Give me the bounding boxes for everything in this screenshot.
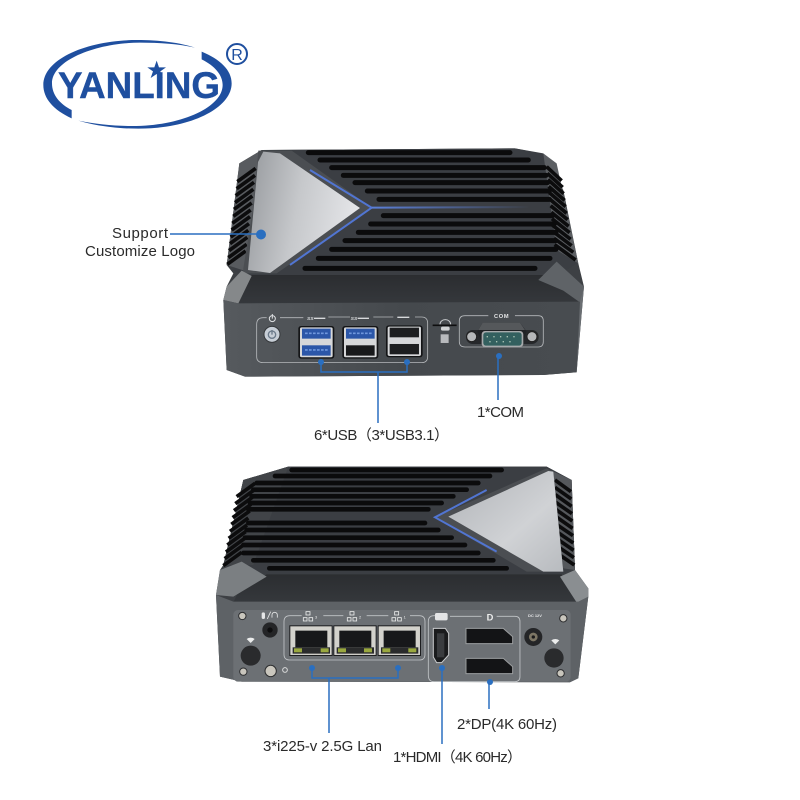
- USB symbols: [307, 316, 409, 322]
- silver triangle panel: [448, 471, 563, 572]
- logo: YANLING: YANLING: [58, 65, 220, 106]
- body silhouette: [216, 467, 588, 682]
- callout: USB: 6*USB（3*USB3.1）: [314, 427, 449, 444]
- chassis bevel and corners: [216, 562, 588, 605]
- callout: customize logo: Support: [112, 225, 169, 242]
- power button: [264, 314, 280, 342]
- silver triangle logo panel: [248, 152, 360, 273]
- blue light strip: [293, 490, 497, 552]
- callout: LAN: 3*i225-v 2.5G Lan: [263, 738, 382, 755]
- LAN icons: 2: [359, 614, 362, 619]
- callout: customize logo: [85, 225, 266, 260]
- COM port: COM: [494, 314, 509, 320]
- panel surround: [243, 151, 372, 273]
- power jack: [524, 613, 542, 646]
- callout: COM: [477, 353, 524, 421]
- callout: customize logo: Customize Logo: [85, 243, 195, 260]
- logo: YANLING: [43, 40, 247, 129]
- audio jack: [262, 612, 278, 638]
- front port outline: [257, 317, 428, 363]
- chassis bevel and corners: [223, 262, 584, 304]
- logo: YANLING: R: [231, 47, 243, 64]
- HDMI and DP outline: [428, 616, 520, 682]
- screws: [239, 612, 567, 677]
- device: rear view mini PC: [216, 467, 588, 682]
- USB 3.1 port 1: [298, 326, 334, 359]
- USB symbols: SS: [351, 316, 358, 322]
- callout: COM: 1*COM: [477, 404, 524, 421]
- body silhouette: [223, 148, 584, 377]
- USB symbols: SS: [307, 316, 314, 322]
- callout: DP: [457, 679, 557, 733]
- HDMI port: [433, 613, 449, 663]
- LAN icons: [303, 612, 407, 621]
- antenna ports: [241, 638, 564, 668]
- power jack: DC 12V: [528, 613, 542, 618]
- DP icon: D: [487, 613, 494, 623]
- device: front view mini PC: [223, 148, 584, 377]
- rear plate: [233, 610, 571, 682]
- top surface: [227, 148, 578, 277]
- COM port: [459, 314, 543, 347]
- LAN port 2: [333, 625, 377, 656]
- DP port 2: [466, 658, 513, 674]
- callout: DP: 2*DP(4K 60Hz): [457, 716, 557, 733]
- callout: HDMI: 1*HDMI（4K 60Hz）: [393, 749, 522, 766]
- blue light strip: [290, 170, 530, 265]
- LAN port outline: [284, 616, 425, 660]
- chassis rear face: [216, 595, 588, 682]
- LAN port 3: [378, 625, 421, 656]
- DP port 1: [466, 628, 513, 644]
- chassis front face: [223, 300, 580, 377]
- callout: LAN: [263, 665, 401, 755]
- LAN icons: 1: [404, 614, 407, 619]
- USB 2.0 port: [386, 325, 423, 357]
- LAN port 1: [289, 625, 333, 656]
- panel surround: [435, 468, 563, 572]
- top surface: [223, 467, 575, 575]
- card slot icon: [433, 320, 457, 343]
- callout: USB: [314, 359, 449, 444]
- LAN icons: 3: [315, 614, 318, 619]
- USB 3.1 port 2: [342, 326, 378, 359]
- callout: HDMI: [393, 665, 522, 766]
